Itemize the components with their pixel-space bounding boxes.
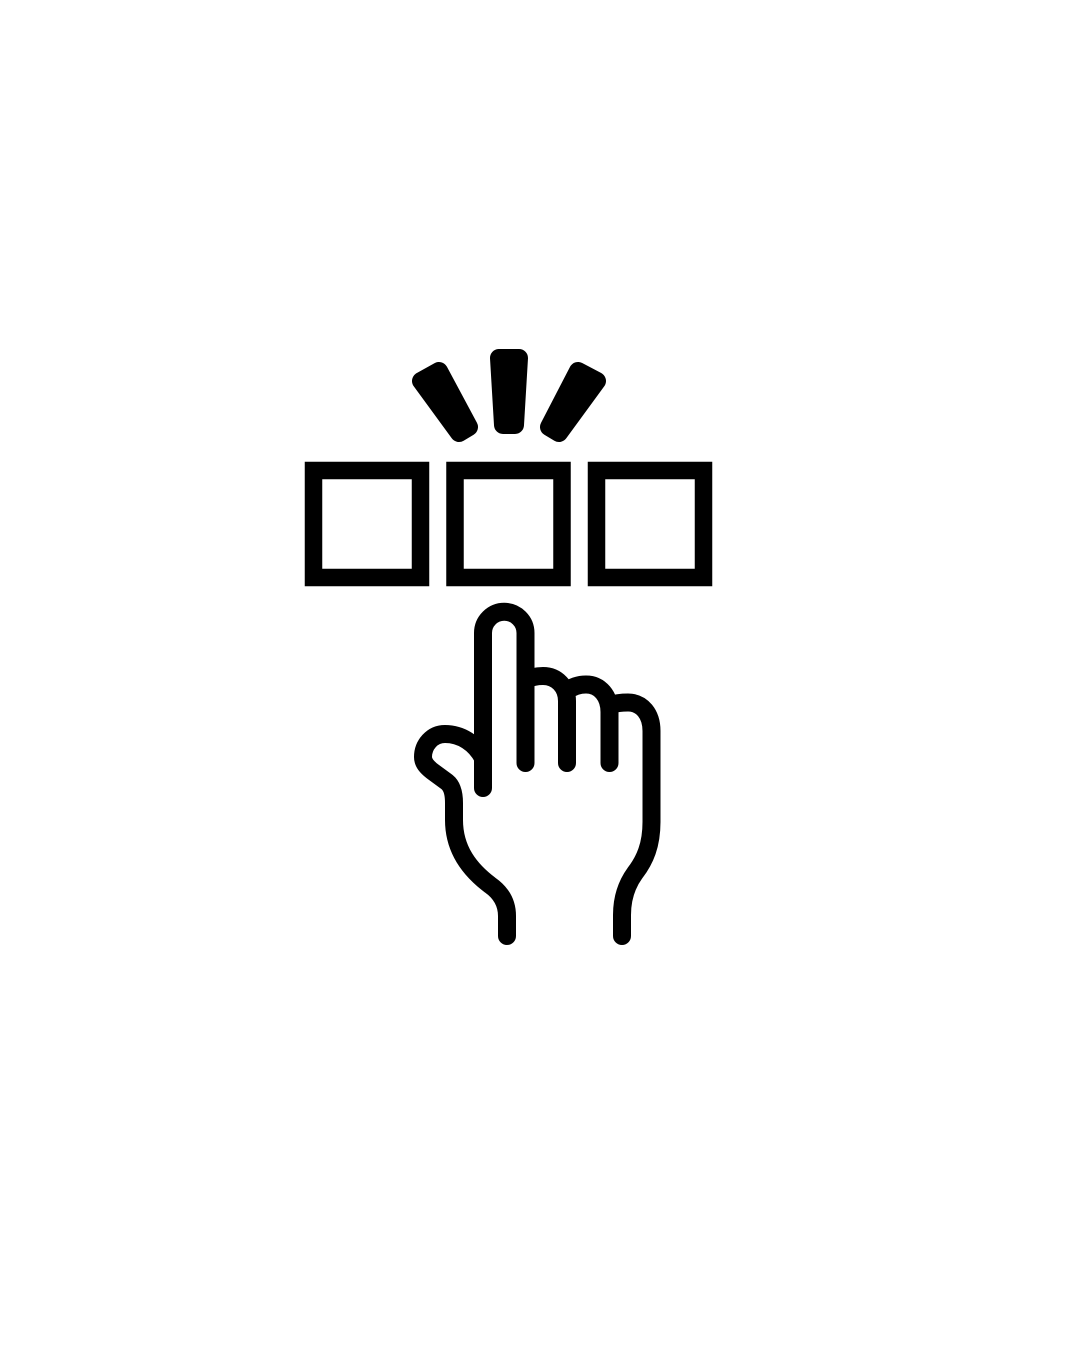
icon: three emphasis rays [421, 358, 597, 433]
icon: pointing hand [423, 612, 652, 936]
row of three square boxes [314, 470, 704, 578]
